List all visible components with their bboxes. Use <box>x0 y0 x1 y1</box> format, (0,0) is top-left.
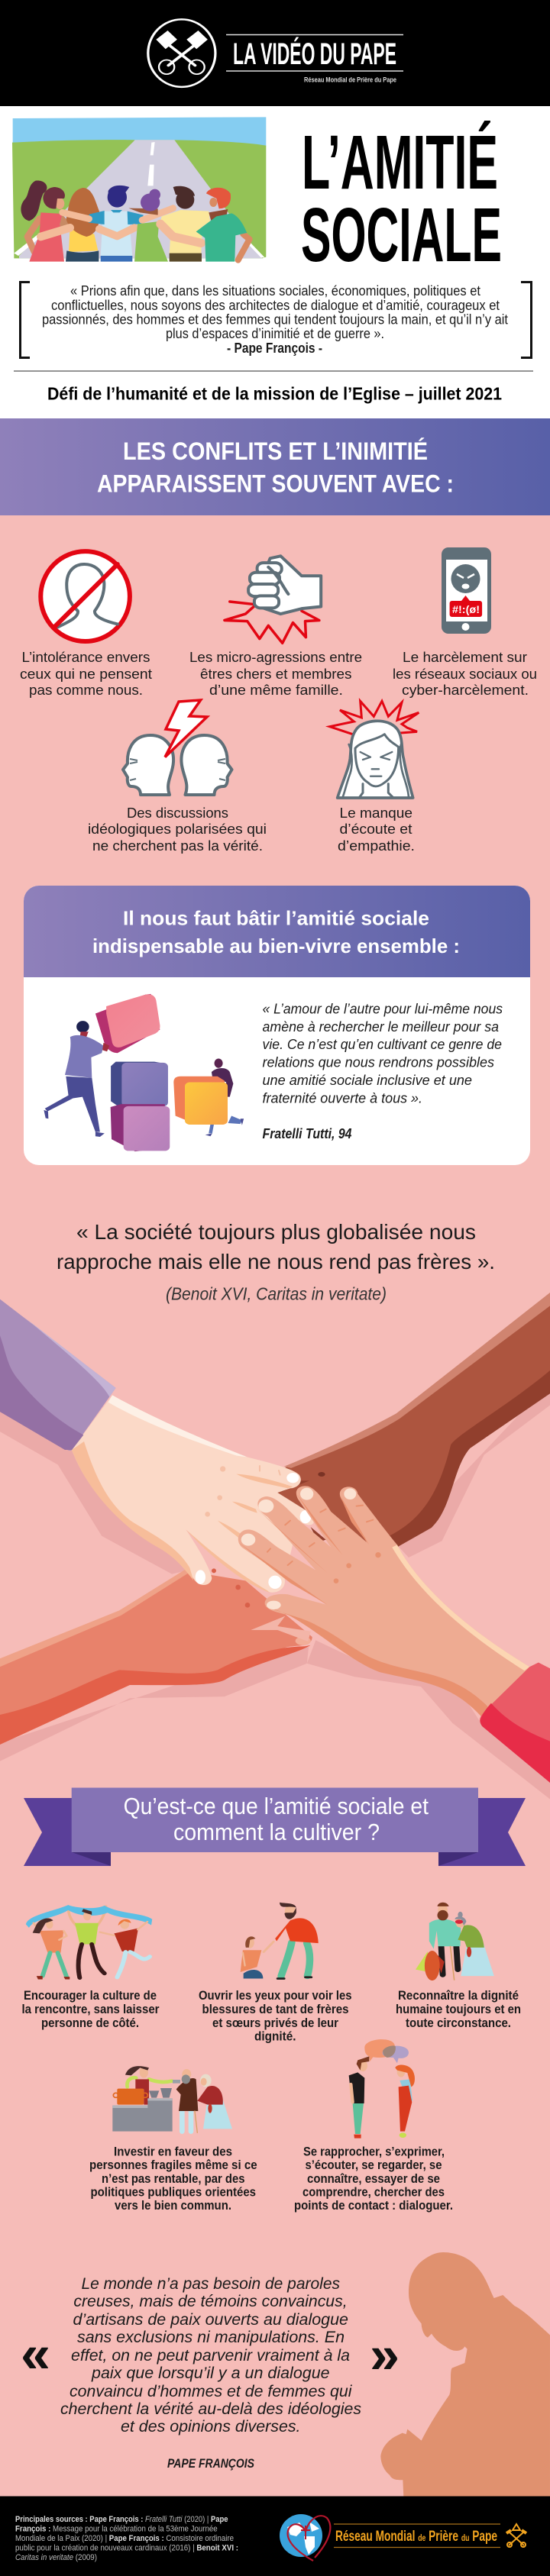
logo rules <box>226 35 403 71</box>
Fratelli Tutti quote: une amitié sociale inclusive et une <box>263 1072 472 1088</box>
friend 2 <box>40 188 99 262</box>
panel: five causes of conflict <box>20 547 537 854</box>
closing quote <box>60 2275 362 2436</box>
illustration: three friends under a cloth <box>26 1905 152 1979</box>
text: intolerance: ceux qui ne pensent <box>20 666 152 682</box>
text: open your eyes: blessures de tant de frères <box>202 2003 348 2016</box>
large quote: « La société toujours plus globalisée nous <box>76 1220 476 1244</box>
quote source: Fratelli Tutti, 94 <box>263 1126 351 1141</box>
footer rules <box>334 2524 500 2547</box>
text: lack of listening <box>338 805 415 854</box>
text: micro-aggressions: êtres chers et membres <box>200 666 351 682</box>
Fratelli Tutti quote <box>263 1000 503 1106</box>
section banner: conflicts: APPARAISSENT SOUVENT AVEC : <box>97 470 454 498</box>
coral arm bottom left <box>0 1569 312 1745</box>
section banner: conflicts: LES CONFLITS ET L’INIMITIÉ <box>123 437 428 465</box>
text: invest in fragile people: vers le bien commun. <box>115 2199 231 2213</box>
ribbon heading: Qu’est-ce que l’amitié sociale et <box>124 1793 429 1819</box>
text: recognise dignity <box>396 1989 521 2030</box>
sources: Principales sources : Pape François : Fratelli Tutti (2020) | Pape <box>15 2515 228 2524</box>
hands meeting in the centre <box>72 1395 529 1718</box>
text: encourage encounter <box>21 1989 160 2030</box>
text: invest in fragile people <box>89 2145 257 2213</box>
closing quote: sans exclusions ni manipulations. En <box>77 2329 345 2346</box>
sleeves <box>0 1299 550 1783</box>
closing quote: effet, on ne peut parvenir vraiment à la <box>71 2347 350 2365</box>
text: invest in fragile people: personnes fragiles même si ce <box>89 2158 257 2172</box>
friend 3 <box>63 186 173 262</box>
text: open your eyes <box>199 1989 351 2043</box>
friend 5 <box>160 186 210 262</box>
text: invest in fragile people: politiques publiques orientées <box>90 2185 256 2199</box>
Fratelli Tutti quote: amène à rechercher le meilleur pour sa <box>263 1018 499 1035</box>
text: draw closer and dialogue: s’écouter, se regarder, se <box>306 2158 442 2172</box>
illustration: food counter for the vulnerable <box>112 2066 232 2132</box>
prayer intention quote: plus d’espaces d’inimitié et de guerre ». <box>166 326 384 341</box>
text: polarised discussions <box>88 805 267 854</box>
icon: fist and impact <box>225 556 321 643</box>
illustration: four joined hands <box>0 1293 550 1800</box>
quote signature: PAPE FRANÇOIS <box>167 2456 255 2471</box>
icon: papal keys <box>506 2524 526 2547</box>
panel: building social friendship <box>24 886 530 1165</box>
text: intolerance <box>20 649 152 698</box>
icon: woman covering her ears <box>330 701 419 798</box>
icon: smartphone with angry face: #!:(ø! <box>452 603 480 615</box>
closing quote: et des opinions diverses. <box>121 2418 301 2436</box>
sources <box>15 2515 238 2562</box>
friend 4 <box>128 189 168 262</box>
right bracket <box>521 282 532 357</box>
prayer intention quote: passionnés, des hommes et des femmes qui tendent toujours la main, et qu’il n’y ait <box>42 312 508 327</box>
sources: François : Message pour la célébration de la 53ème Journée <box>15 2524 218 2533</box>
sources: Caritas in veritate (2009) <box>15 2553 97 2562</box>
text: recognise dignity: humaine toujours et en <box>396 2003 521 2016</box>
text: invest in fragile people: Investir en faveur des <box>114 2145 232 2159</box>
brand name: LA VIDÉO DU PAPE <box>233 37 396 71</box>
page background: pink <box>0 515 550 2500</box>
main title <box>301 120 502 278</box>
illustration: people stacking blocks <box>44 994 244 1151</box>
text: cyber-harassment: cyber-harcèlement. <box>402 682 529 698</box>
icon: two opposed heads and lightning <box>123 700 232 795</box>
logo: globe and heart <box>280 2514 330 2561</box>
logo: crossed keys in a circle <box>148 19 215 87</box>
text: lack of listening: d’écoute et <box>339 821 412 837</box>
text: micro-aggressions: Les micro-agressions entre <box>189 649 362 665</box>
text: open your eyes: Ouvrir les yeux pour voir les <box>199 1989 351 2003</box>
white intro background <box>0 106 550 419</box>
arms under the hands <box>0 1293 550 1800</box>
lilac sleeve <box>0 1299 116 1451</box>
closing quote: creuses, mais de témoins convaincus, <box>73 2293 348 2310</box>
ribbon heading <box>24 1788 526 1866</box>
text: lack of listening: d’empathie. <box>338 838 415 854</box>
quote attribution: (Benoit XVI, Caritas in veritate) <box>166 1284 387 1304</box>
details under the hands <box>212 1472 326 1641</box>
divider <box>14 370 533 372</box>
prayer intention quote: « Prions afin que, dans les situations sociales, économiques, politiques et <box>70 283 480 299</box>
text: encourage encounter: personne de côté. <box>41 2016 139 2030</box>
closing quotation mark: » <box>370 2325 400 2384</box>
closing quote: paix que lorsqu’il y a un dialogue <box>91 2365 330 2382</box>
header band <box>0 0 550 106</box>
icon: smartphone with angry face <box>442 547 491 634</box>
opening quotation mark: « <box>21 2324 50 2384</box>
text: micro-aggressions: d’une même famille. <box>209 682 343 698</box>
section banner: conflicts <box>0 418 550 515</box>
Fratelli Tutti quote: « L’amour de l’autre pour lui-même nous <box>263 1000 503 1017</box>
left bracket <box>20 282 30 357</box>
text: recognise dignity: Reconnaître la dignité <box>398 1989 519 2003</box>
Fratelli Tutti quote: vie. Ce n’est qu’en cultivant ce genre de <box>263 1036 502 1052</box>
text: open your eyes: et sœurs privés de leur <box>212 2016 339 2030</box>
illustration: friends on the road <box>12 117 266 262</box>
text: recognise dignity: toute circonstance. <box>406 2016 511 2030</box>
tan hand <box>238 1486 529 1718</box>
text: micro-aggressions <box>189 649 362 698</box>
panel heading: indispensable au bien-vivre ensemble : <box>92 935 460 957</box>
text: intolerance: pas comme nous. <box>29 682 143 698</box>
illustration: two people in dialogue <box>349 2039 415 2139</box>
text: draw closer and dialogue: comprendre, chercher des <box>302 2185 445 2199</box>
text: draw closer and dialogue <box>294 2145 453 2213</box>
text: intolerance: L’intolérance envers <box>21 649 150 665</box>
text: polarised discussions: idéologiques polarisées qui <box>88 821 267 837</box>
text: cyber-harassment <box>393 649 537 698</box>
prayer intention quote <box>42 283 508 356</box>
red sleeve <box>480 1662 550 1783</box>
footer band <box>0 2497 550 2576</box>
hand shadows <box>0 1382 550 1800</box>
closing quote: d’artisans de paix ouverts au dialogue <box>73 2311 348 2329</box>
icon: person crossed out <box>40 551 130 641</box>
builder on the left <box>44 1021 109 1137</box>
friend 1 <box>21 180 69 262</box>
closing quote: Le monde n’a pas besoin de paroles <box>81 2275 340 2293</box>
text: draw closer and dialogue: points de contact : dialoguer. <box>294 2199 453 2213</box>
ribbon heading: comment la cultiver ? <box>173 1819 380 1845</box>
friend 6 <box>196 188 250 262</box>
challenge line: Défi de l’humanité et de la mission de l’Eglise – juillet 2021 <box>47 383 502 403</box>
text: invest in fragile people: n’est pas rentable, par des <box>102 2172 244 2186</box>
builder on the right <box>205 1058 244 1136</box>
sources: Mondiale de la Paix (2020) | Pape François : Consistoire ordinaire <box>15 2534 234 2543</box>
Fratelli Tutti quote: fraternité ouverte à tous ». <box>263 1090 422 1106</box>
text: draw closer and dialogue: Se rapprocher, s’exprimer, <box>303 2145 445 2159</box>
text: draw closer and dialogue: connaître, essayer de se <box>307 2172 440 2186</box>
large quote: rapproche mais elle ne nous rend pas frères ». <box>57 1250 495 1273</box>
text: encourage encounter: Encourager la culture de <box>24 1989 157 2003</box>
brown arm top right <box>245 1293 550 1548</box>
prayer intention quote: - Pape François - <box>227 341 322 356</box>
illustration: man helping an elderly woman <box>416 1903 494 1980</box>
text: open your eyes: dignité. <box>254 2029 296 2043</box>
text: lack of listening: Le manque <box>339 805 412 821</box>
panel: five ways to cultivate <box>21 1903 521 2213</box>
illustration: man helping a child up <box>241 1903 319 1978</box>
text: cyber-harassment: les réseaux sociaux ou <box>393 666 537 682</box>
brand sub line: Réseau Mondial de Prière du Pape <box>304 76 396 84</box>
pale hand <box>72 1395 314 1593</box>
closing quote: convaincu d’hommes et de femmes qui <box>70 2383 353 2400</box>
text: polarised discussions: Des discussions <box>127 805 228 821</box>
text: encourage encounter: la rencontre, sans laisser <box>21 2003 160 2016</box>
large quote <box>57 1220 495 1273</box>
Fratelli Tutti quote: relations que nous rendrons possibles <box>263 1054 494 1070</box>
text: polarised discussions: ne cherchent pas la vérité. <box>92 838 263 854</box>
sources: public pour la création de nouveaux cardinaux (2016) | Benoit XVI : <box>15 2544 238 2553</box>
silhouette: Pope Francis praying <box>380 2252 550 2497</box>
closing quote: cherchent la vérité au-delà des idéologies <box>60 2400 362 2418</box>
text: cyber-harassment: Le harcèlement sur <box>403 649 527 665</box>
panel heading: Il nous faut bâtir l’amitié sociale <box>123 907 429 930</box>
panel heading <box>24 886 530 977</box>
prayer intention quote: conflictuelles, nous soyons des architectes de dialogue et d’amitié, courageux et <box>51 298 500 313</box>
network name: Réseau Mondial de Prière du Pape <box>335 2529 497 2545</box>
